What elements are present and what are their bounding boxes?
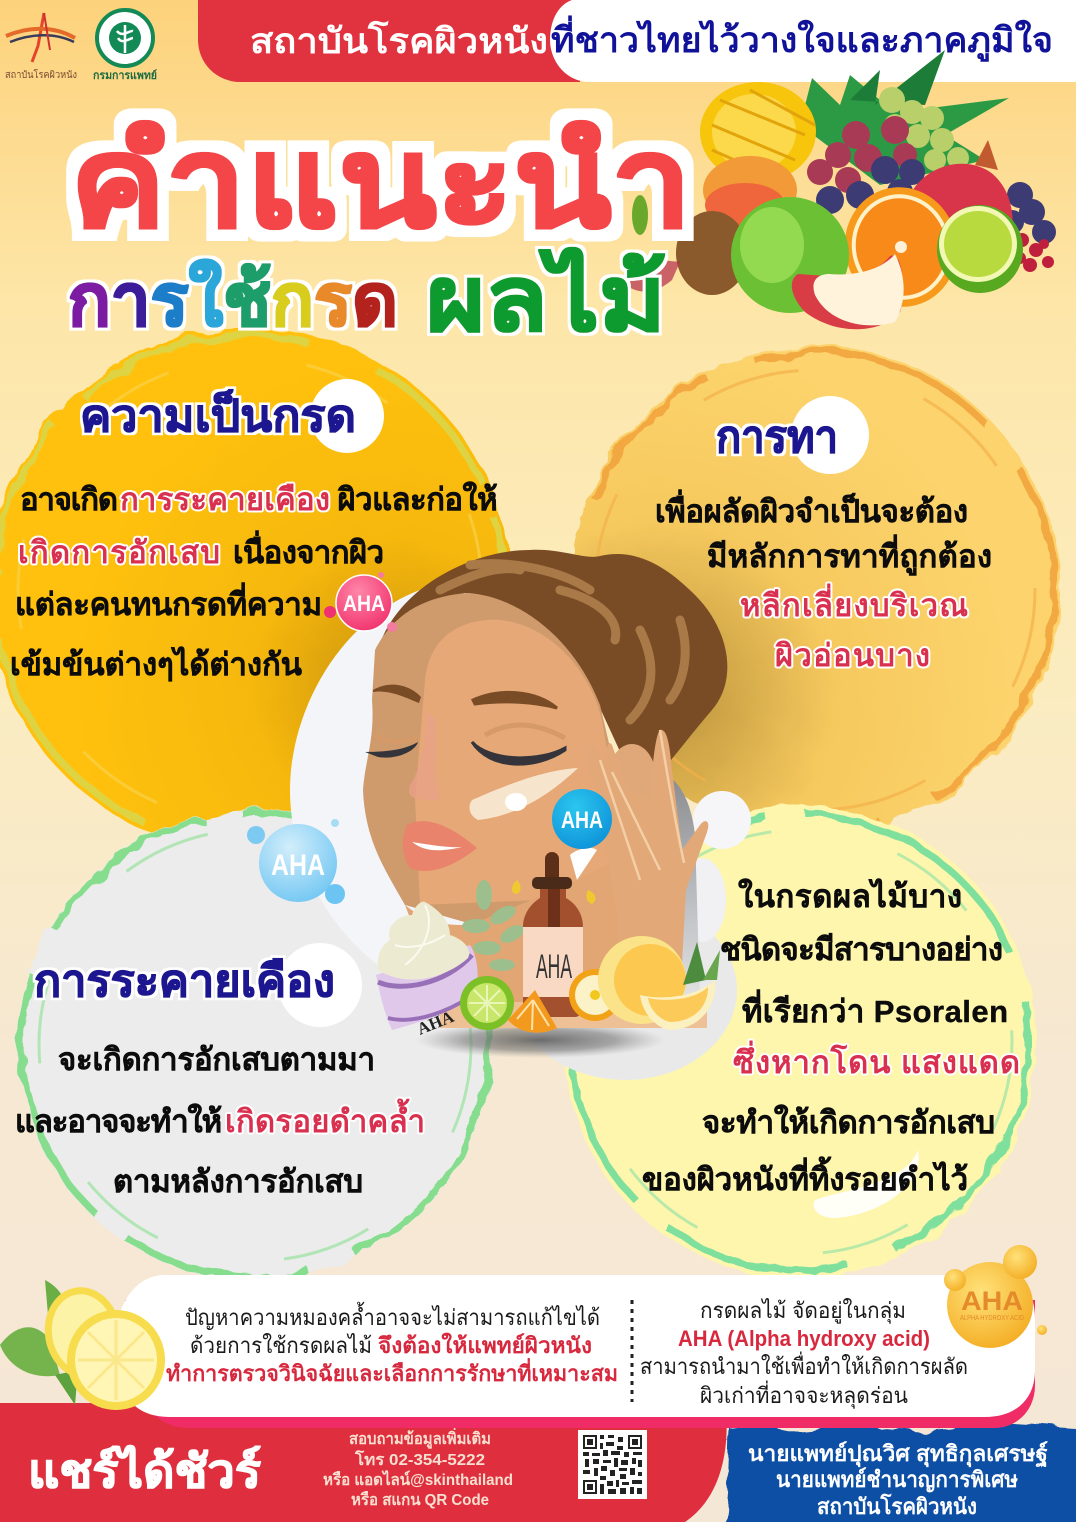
panel: doctor credit: นายแพทย์ปุณวิศ สุทธิกุลเศรษฐ์	[748, 1441, 1048, 1468]
neck	[405, 860, 625, 1010]
green grapes	[879, 87, 969, 171]
text block: application	[655, 489, 992, 673]
hand	[585, 730, 708, 1000]
light grey blob at lower right	[513, 900, 737, 1080]
text block: psoralen: ของผิวหนังที่ทิ้งรอยดำไว้	[642, 1156, 968, 1197]
icon: AHA blue bubble	[552, 789, 612, 849]
icon: AHA pink bubble: AHA	[343, 591, 385, 616]
contact info: หรือ สแกน QR Code	[351, 1491, 489, 1509]
peach	[703, 156, 797, 224]
heading: acidity: ความเป็นกรด	[80, 389, 356, 441]
orange slice	[508, 990, 557, 1033]
text block: psoralen: ชนิดจะมีสารบางอย่าง	[720, 932, 1003, 967]
base shelf shadow	[415, 1022, 665, 1058]
text block: acidity: อาจเกิด	[20, 482, 118, 517]
text block: application: หลีกเลี่ยงบริเวณ	[740, 583, 968, 623]
eyebrows	[373, 685, 421, 703]
eyelids	[375, 725, 565, 742]
panel: doctor credit	[716, 1424, 1076, 1522]
contact info: หรือ แอดไลน์@skinthailand	[323, 1470, 513, 1489]
text block: acidity: ผิวและก่อให้	[338, 481, 498, 517]
icon: institute of dermatology logo: สถาบันโรคผิวหนัง	[5, 68, 77, 81]
illustration: AHA serum bottle: AHA	[536, 948, 572, 986]
panel: psoralen circle	[564, 806, 1036, 1278]
text block: irritation	[15, 1042, 425, 1199]
contact info: สอบถามข้อมูลเพิ่มเติม	[349, 1427, 491, 1450]
text block: AHA group: AHA (Alpha hydroxy acid)	[678, 1326, 930, 1351]
text block: AHA group: สามารถนำมาใช้เพื่อทำให้เกิดการผลัด	[640, 1351, 968, 1379]
backdrop circle	[290, 590, 520, 1010]
header bar	[198, 0, 1076, 82]
lime	[937, 205, 1023, 293]
panel: acidity circle	[0, 328, 512, 852]
heading: application	[716, 396, 869, 474]
panel: doctor credit: นายแพทย์ชำนาญการพิเศษ	[776, 1467, 1018, 1493]
icon: AHA blue bubble: AHA	[561, 807, 603, 834]
heading: acidity	[80, 379, 384, 453]
text block: psoralen: จะทำให้เกิดการอักเสบ	[702, 1104, 995, 1140]
text block: application: ผิวอ่อนบาง	[775, 638, 930, 673]
face highlight	[415, 620, 620, 905]
lime	[460, 976, 514, 1030]
kumquat	[569, 969, 621, 1021]
icon: lemon slices and mint	[0, 1280, 165, 1410]
green apple	[731, 197, 849, 313]
text block: irritation: เกิดรอยดำคล้ำ	[225, 1098, 425, 1139]
icon: gold AHA bubble: AHA	[961, 1286, 1023, 1316]
subtitle: fruit acid use: การใช้กรด	[68, 258, 398, 341]
heading: irritation	[34, 943, 362, 1027]
lips	[403, 821, 477, 871]
text block: acidity	[10, 481, 498, 682]
white sliver and drops	[570, 848, 597, 880]
text block: psoralen	[642, 878, 1020, 1197]
illustration: citrus fruits	[460, 936, 720, 1033]
icon: AHA pink bubble	[324, 572, 397, 632]
icon: AHA light blue bubble	[247, 819, 345, 904]
icon: AHA light blue bubble: AHA	[271, 849, 325, 882]
hair	[375, 550, 727, 795]
illustration: cream jar	[376, 902, 478, 1039]
illustration: fruit pile	[620, 50, 1056, 329]
heading: application: การทา	[716, 413, 838, 462]
apple slice	[792, 256, 903, 329]
pomegranate	[910, 164, 1013, 250]
text block: irritation: ตามหลังการอักเสบ	[113, 1164, 363, 1199]
silver shadow behind neck	[575, 769, 700, 1010]
subtitle: fruit: ผลไม้	[426, 248, 666, 350]
orange half	[832, 175, 970, 319]
text block: AHA group: กรดผลไม้ จัดอยู่ในกลุ่ม	[700, 1298, 906, 1324]
text block: consult a dermatologist: ด้วยการใช้กรดผลไม้	[190, 1333, 372, 1358]
illustration: AHA serum bottle	[523, 852, 583, 1017]
text block: consult a dermatologist	[166, 1302, 618, 1386]
text block: consult a dermatologist: ทำการตรวจวินิจฉัยและเลือกการรักษาที่เหมาะสม	[166, 1357, 618, 1386]
kiwi	[676, 211, 748, 295]
nose	[409, 710, 440, 800]
heading: irritation: การระคายเคือง	[34, 957, 335, 1006]
divider	[630, 1300, 634, 1402]
panel: irritation circle	[19, 809, 491, 1281]
icon: department of medical services logo	[93, 10, 157, 82]
text block: application: เพื่อผลัดผิวจำเป็นจะต้อง	[655, 489, 968, 529]
text block: acidity: แต่ละคนทนกรดที่ความ	[15, 582, 322, 622]
illustration: woman applying AHA cream	[290, 550, 751, 1080]
icon: QR code	[578, 1430, 647, 1499]
face	[363, 593, 640, 950]
text block: psoralen: ที่เรียกว่า Psoralen	[742, 989, 1008, 1029]
footer red bar	[0, 1403, 727, 1522]
text block: acidity: เข้มข้นต่างๆได้ต่างกัน	[10, 646, 302, 682]
pineapple	[700, 50, 1009, 185]
text block: irritation: จะเกิดการอักเสบตามมา	[58, 1042, 375, 1077]
eyes	[365, 742, 418, 758]
share slogan: แชร์ได้ชัวร์	[28, 1445, 261, 1497]
text block: AHA group: ผิวเก่าที่อาจจะหลุดร่อน	[700, 1380, 908, 1409]
side circles	[693, 791, 751, 849]
red grapes	[807, 116, 917, 193]
cream streak	[470, 768, 578, 820]
icon: gold AHA bubble	[944, 1245, 1047, 1348]
text block: consult a dermatologist: จึงต้องให้แพทย์ผิวหนัง	[378, 1332, 592, 1358]
leaf pattern on neck	[462, 880, 527, 971]
icon: department of medical services logo: กรมการแพทย์	[93, 69, 157, 82]
panel: doctor credit: สถาบันโรคผิวหนัง	[817, 1493, 977, 1519]
header text: institute: สถาบันโรคผิวหนัง	[250, 20, 548, 61]
header text: slogan: ที่ชาวไทยไว้วางใจและภาคภูมิใจ	[551, 15, 1053, 62]
pomegranate seeds	[1014, 233, 1054, 272]
text block: psoralen: ซึ่งหากโดน แสงแดด	[733, 1040, 1020, 1080]
illustration: cream jar: AHA	[414, 1007, 457, 1039]
contact info: โทร 02-354-5222	[354, 1449, 485, 1469]
contact info	[323, 1427, 513, 1509]
panel: bottom advice card	[115, 1275, 1035, 1428]
icon: institute of dermatology logo	[5, 13, 77, 81]
text block: AHA group	[640, 1298, 968, 1409]
hair highlights	[440, 564, 685, 720]
lemons	[598, 936, 686, 1024]
text block: irritation: และอาจจะทำให้	[15, 1103, 222, 1139]
text block: application: มีหลักการทาที่ถูกต้อง	[707, 534, 992, 576]
text block: acidity: การระคายเคือง	[120, 482, 330, 517]
panel: application circle	[571, 346, 1059, 834]
icon: gold AHA bubble: ALPHA HYDROXY ACID	[960, 1315, 1024, 1322]
text block: acidity: เกิดการอักเสบ	[18, 535, 220, 570]
title: คำแนะนำ	[70, 112, 692, 253]
text block: psoralen: ในกรดผลไม้บาง	[738, 878, 962, 914]
ear	[608, 744, 656, 812]
text block: consult a dermatologist: ปัญหาความหมองคล้ำอาจจะไม่สามารถแก้ไขได้	[185, 1302, 600, 1330]
text block: acidity: เนื่องจากผิว	[233, 530, 384, 570]
dark grapes	[816, 156, 1056, 244]
